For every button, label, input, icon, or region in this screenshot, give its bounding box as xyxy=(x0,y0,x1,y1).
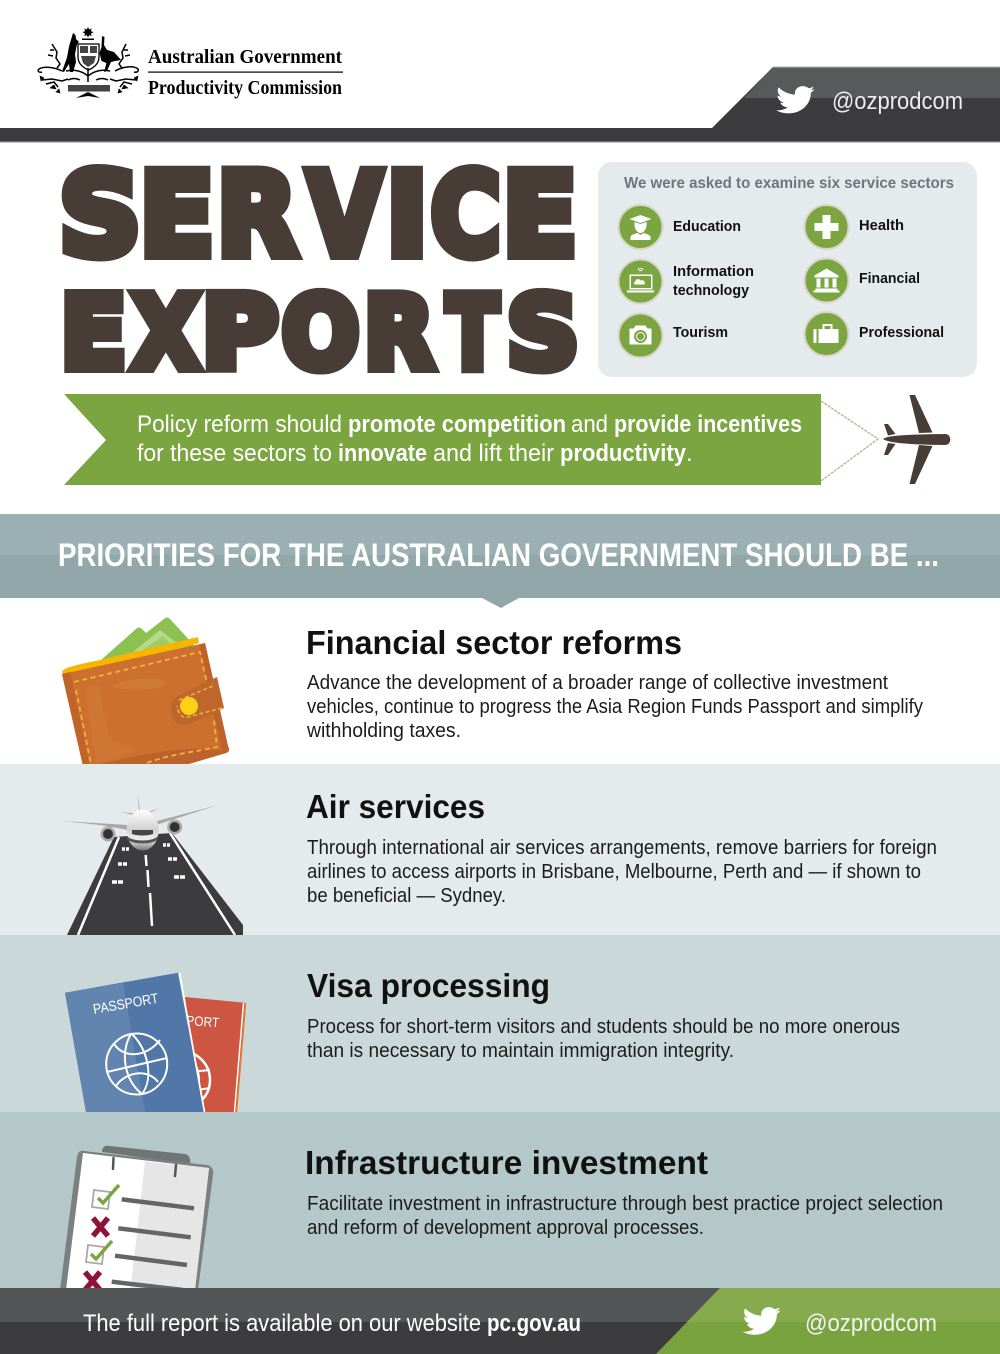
icon: education xyxy=(618,205,662,249)
heading: Infrastructure investment: Infrastructure investment xyxy=(305,1144,708,1181)
icon: tourism camera xyxy=(618,314,662,358)
icon: twitter bird xyxy=(743,1307,781,1335)
icon: passports: PASSPORT xyxy=(92,990,160,1017)
body text: Advance the development of a broader range of collective investment xyxy=(307,672,888,694)
banner text line 2: . xyxy=(686,440,693,467)
icon: passports: PORT xyxy=(186,1013,220,1030)
section: air services xyxy=(0,764,1000,935)
label: Health: Health xyxy=(859,218,904,234)
footer text: The full report is available on our website xyxy=(83,1310,481,1337)
body text xyxy=(307,1016,900,1062)
banner text line 1: provide incentives xyxy=(614,411,802,438)
panel: six service sectors xyxy=(598,162,977,377)
body text: vehicles, continue to progress the Asia Region Funds Passport and simplify xyxy=(307,696,923,718)
icon: professional briefcase xyxy=(804,312,848,356)
body text: airlines to access airports in Brisbane, Melbourne, Perth and — if shown to xyxy=(307,861,921,883)
title: Service Exports: V xyxy=(307,148,382,282)
body text xyxy=(307,1193,943,1239)
title: Service Exports: E xyxy=(140,148,214,282)
title: Service Exports: E xyxy=(61,274,126,392)
title: Service Exports: S xyxy=(507,274,579,392)
label: Professional: Professional xyxy=(859,325,944,341)
heading: Financial sector reforms: Financial sector reforms xyxy=(306,624,682,661)
heading: Productivity Commission: Productivity Commission xyxy=(148,77,342,99)
label: Information technology: technology xyxy=(673,283,749,299)
body text xyxy=(306,672,923,742)
footer text: pc.gov.au xyxy=(487,1310,581,1337)
icon: information technology xyxy=(618,260,662,304)
label: Tourism: Tourism xyxy=(673,325,728,341)
icon: plane silhouette xyxy=(883,395,950,484)
body text: Through international air services arrangements, remove barriers for foreign xyxy=(307,837,937,859)
icon: wallet xyxy=(62,618,229,766)
label: Education: Education xyxy=(673,219,741,235)
title: Service Exports: R xyxy=(217,148,297,282)
icon: passports xyxy=(65,973,246,1112)
banner text line 1: Policy reform should xyxy=(137,411,342,438)
banner text line 2: for these sectors to xyxy=(137,440,332,467)
priorities heading band xyxy=(0,514,1000,608)
icon: twitter bird xyxy=(776,86,815,113)
label: Information technology xyxy=(673,264,754,299)
label: Financial: Financial xyxy=(859,271,920,287)
title: Service Exports: T xyxy=(447,274,498,392)
twitter handle: @ozprodcom xyxy=(832,88,963,115)
title: Service Exports: O xyxy=(282,274,359,392)
heading: Australian Government: Australian Government xyxy=(148,46,342,68)
body text: be beneficial — Sydney. xyxy=(307,885,506,907)
heading: Air services: Air services xyxy=(306,788,485,825)
banner text line 1: and xyxy=(571,411,608,438)
body text: Facilitate investment in infrastructure through best practice project selection xyxy=(307,1193,943,1215)
body text: Process for short-term visitors and students should be no more onerous xyxy=(307,1016,900,1038)
banner text line 1: promote competition xyxy=(348,411,566,438)
title: Service Exports: E xyxy=(502,148,577,282)
header band xyxy=(0,66,1000,142)
dashed arrow lines to plane xyxy=(821,401,878,481)
body text: withholding taxes. xyxy=(306,720,461,742)
title: Service Exports: I xyxy=(386,148,428,282)
icon: plane on runway xyxy=(62,792,243,935)
icon: health cross xyxy=(804,205,848,249)
icon: clipboard checklist xyxy=(60,1146,213,1290)
twitter handle: @ozprodcom xyxy=(805,1310,937,1337)
banner text line 2: and lift their xyxy=(433,440,554,467)
title: Service Exports xyxy=(59,148,579,392)
banner text line 2: innovate xyxy=(338,440,427,467)
section: financial sector reforms xyxy=(62,618,923,766)
label: Information technology: Information xyxy=(673,264,754,280)
title: Service Exports: S xyxy=(59,148,141,282)
body text xyxy=(307,837,937,907)
title: Service Exports: C xyxy=(431,148,501,282)
body text: than is necessary to maintain immigration integrity. xyxy=(307,1040,734,1062)
section: visa processing xyxy=(0,935,1000,1112)
body text: and reform of development approval processes. xyxy=(307,1217,704,1239)
title: Service Exports: P xyxy=(202,274,278,392)
panel heading: We were asked to examine six service sectors xyxy=(624,175,954,192)
icon: financial bank xyxy=(804,258,848,302)
footer band xyxy=(0,1288,1000,1354)
banner text line 2: productivity xyxy=(560,440,687,467)
arrow banner: policy reform xyxy=(64,394,821,485)
heading: Visa processing: Visa processing xyxy=(307,967,550,1004)
title: Service Exports: R xyxy=(364,274,434,392)
logo: Australian Government Productivity Commission xyxy=(38,27,343,99)
title: Service Exports: X xyxy=(132,274,200,392)
icon: coat of arms xyxy=(38,27,138,98)
section: infrastructure investment xyxy=(0,1112,1000,1290)
